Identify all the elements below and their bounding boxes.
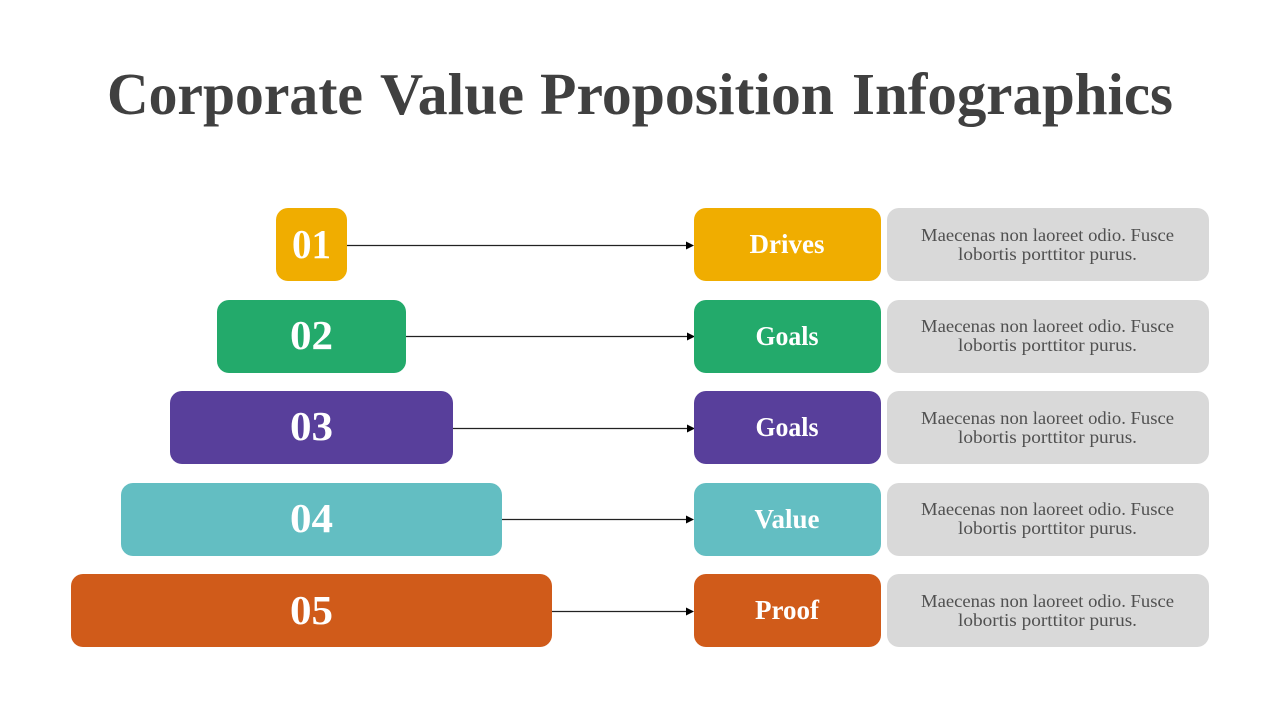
- row 4: Value: [121, 483, 1209, 556]
- step bar 05: [71, 574, 552, 647]
- label: Proof: [694, 574, 881, 647]
- step bar 02: 02: [290, 312, 333, 358]
- description 2: [887, 300, 1209, 373]
- description 5: Maecenas non laoreet odio. Fusce: [921, 591, 1174, 611]
- description 4: lobortis porttitor purus.: [958, 518, 1137, 538]
- label: Goals: [694, 300, 881, 373]
- label: Proof: Proof: [755, 595, 820, 625]
- step bar 03: 03: [290, 403, 333, 449]
- description 4: Maecenas non laoreet odio. Fusce: [921, 499, 1174, 519]
- title: Infographics: [852, 61, 1173, 127]
- label: Value: [694, 483, 881, 556]
- label: Goals: Goals: [756, 321, 818, 351]
- description 3: [887, 391, 1209, 464]
- description 4: [887, 483, 1209, 556]
- title: Corporate: [107, 61, 363, 127]
- description 1: [887, 208, 1209, 281]
- title: Value: [380, 61, 524, 127]
- description 3: Maecenas non laoreet odio. Fusce: [921, 408, 1174, 428]
- label: Goals: Goals: [756, 412, 818, 442]
- step bar 04: [121, 483, 502, 556]
- description 5: lobortis porttitor purus.: [958, 610, 1137, 630]
- description 1: Maecenas non laoreet odio. Fusce: [921, 225, 1174, 245]
- arrow 04: [502, 516, 694, 524]
- step bar 02: [217, 300, 406, 373]
- arrow 01: [347, 242, 694, 250]
- label: Drives: [694, 208, 881, 281]
- description 2: lobortis porttitor purus.: [958, 335, 1137, 355]
- description 3: lobortis porttitor purus.: [958, 427, 1137, 447]
- label: Drives: Drives: [750, 229, 824, 259]
- row 1: Drives: [276, 208, 1209, 281]
- label: Value: Value: [754, 504, 820, 534]
- label: Goals: [694, 391, 881, 464]
- row 3: Goals: [170, 391, 1209, 464]
- step bar 01: [276, 208, 347, 281]
- row 2: Goals: [217, 300, 1209, 373]
- arrow 05: [552, 608, 694, 616]
- step bar 01: 01: [292, 221, 331, 267]
- step bar 03: [170, 391, 453, 464]
- row 5: Proof: [71, 574, 1209, 647]
- title: Proposition: [540, 61, 834, 127]
- step bar 05: 05: [290, 587, 333, 633]
- arrow 02: [406, 332, 695, 340]
- description 1: lobortis porttitor purus.: [958, 244, 1137, 264]
- description 2: Maecenas non laoreet odio. Fusce: [921, 316, 1174, 336]
- description 5: [887, 574, 1209, 647]
- arrow 03: [453, 424, 695, 432]
- title: [107, 61, 1173, 127]
- step bar 04: 04: [290, 495, 333, 541]
